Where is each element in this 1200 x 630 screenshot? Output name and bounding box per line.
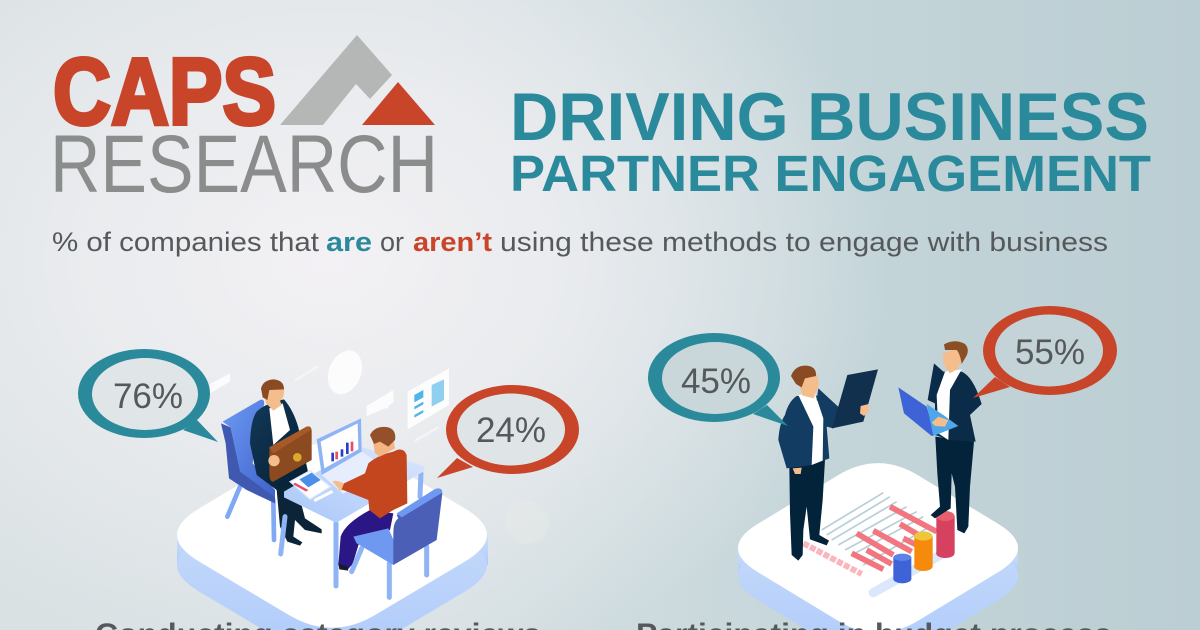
desk [281,447,425,586]
laptop [898,387,958,436]
left man [250,379,312,490]
bubble: 24% [437,385,579,478]
logo word CAPS: CAPS [53,39,276,145]
bubble: 76%: 76% [113,377,183,416]
illustration: two people at a desk [210,345,449,597]
title [510,79,1151,202]
subtitle: are [326,227,372,257]
held tablet [832,369,878,428]
illustration: two people with chart [778,341,982,593]
logo peak triangle [362,82,435,125]
floating white shapes [210,345,438,442]
left man legs [260,473,322,546]
bubble: 55% [973,306,1117,398]
left man [778,366,878,561]
briefcase [268,426,312,482]
title: PARTNER ENGAGEMENT [510,145,1151,202]
platform right [738,463,1018,630]
cylinders [893,511,955,583]
bubble: 45%: 45% [681,362,751,401]
floating document [408,368,449,429]
logo word RESEARCH: RESEARCH [50,119,438,210]
right chair [352,488,442,597]
laptop [317,418,382,494]
subtitle: % of companies that [52,227,320,257]
floor chart [803,493,943,593]
right man [333,427,407,571]
logo: CAPS Research [50,35,438,210]
subtitle: aren’t [413,227,492,257]
tablet [290,471,333,502]
platform left [177,442,488,630]
bubble: 45% [648,333,788,426]
bubble: 76% [78,349,218,442]
right man [898,341,982,533]
subtitle [52,227,1108,257]
logo mountain [280,35,392,125]
bubble: 55%: 55% [1015,333,1085,372]
title: DRIVING BUSINESS [510,79,1149,155]
subtitle: using these methods to engage with business [500,227,1108,257]
subtitle: or [380,227,404,257]
bubble: 24%: 24% [476,411,546,450]
left chair [221,400,275,540]
decorative glow circle [505,500,549,544]
